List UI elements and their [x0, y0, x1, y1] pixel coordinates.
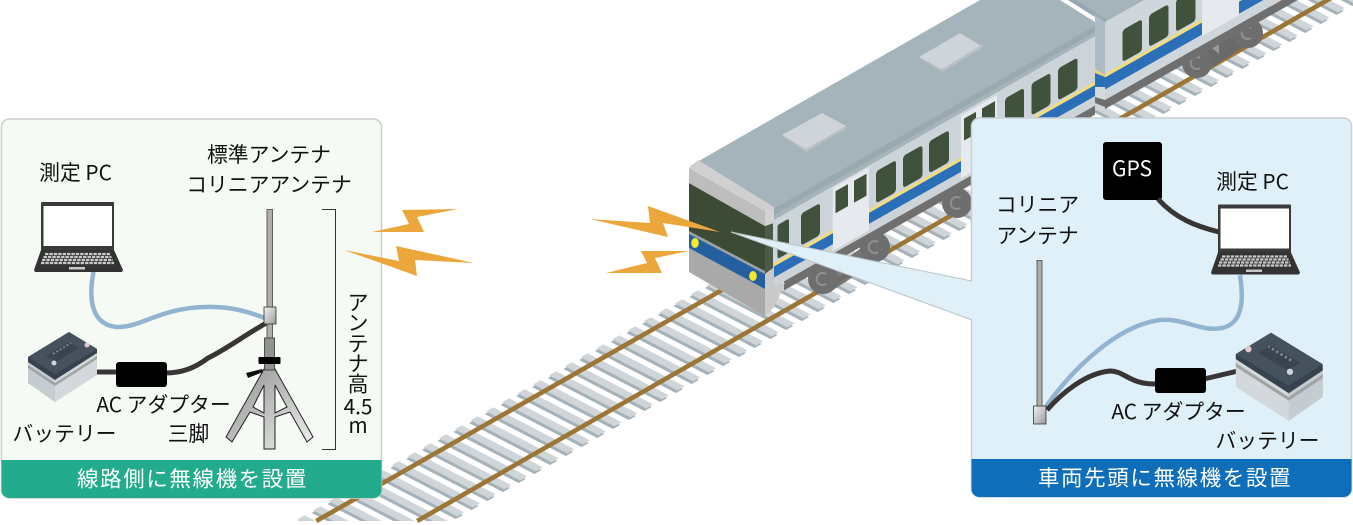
- label: antenna height: 4.5: [344, 390, 372, 420]
- icon: laptop: [34, 202, 123, 272]
- label: AC adapter: AC アダプター: [1111, 395, 1246, 425]
- doors: [833, 167, 869, 251]
- icon: battery: [28, 332, 97, 402]
- label: measurement PC: 測定 PC: [1216, 165, 1289, 195]
- callout pointer: [731, 232, 973, 320]
- footer text: 車両先頭に無線機を設置: [1038, 462, 1292, 492]
- wheels of first car: [808, 188, 972, 294]
- label: antenna height: 高: [348, 368, 368, 398]
- first car side wall: [772, 32, 1095, 297]
- icon: antenna on tripod: [226, 210, 313, 449]
- icon: AC adapter: [116, 362, 167, 387]
- bracket: antenna height: [322, 210, 336, 450]
- label: tripod: 三脚: [168, 417, 209, 447]
- windows: [778, 219, 789, 259]
- label: antenna height: [344, 286, 372, 439]
- icon: GPS unit: GPS: [1112, 153, 1152, 183]
- label: antenna height: テ: [348, 327, 368, 357]
- label: antenna height: m: [348, 409, 368, 439]
- panel: trackside radio: [2, 119, 382, 498]
- icon: antenna: [1034, 260, 1046, 424]
- label: antenna height: ン: [348, 306, 368, 336]
- blue cable: [1045, 275, 1242, 408]
- label: antenna names: コリニアアンテナ: [186, 168, 352, 198]
- label: AC adapter: AC アダプター: [96, 388, 231, 418]
- radio waves from trackside: [344, 209, 474, 276]
- label: collinear antenna: [996, 188, 1079, 249]
- label: battery: バッテリー: [13, 417, 116, 447]
- label: battery: バッテリー: [1216, 424, 1319, 454]
- stripes: [774, 230, 833, 266]
- power cable: [1047, 371, 1238, 410]
- label: measurement PC: 測定 PC: [39, 156, 112, 186]
- wheels of second car: [1182, 18, 1263, 78]
- panel footer: trackside: [2, 460, 382, 498]
- icon: battery: [1236, 333, 1323, 421]
- icon: laptop: [1211, 204, 1300, 274]
- train front: [689, 160, 785, 316]
- roof: [690, 0, 1095, 220]
- label: antenna height: ア: [348, 286, 368, 316]
- icon: AC adapter: [1155, 368, 1206, 393]
- GPS cable: [1158, 199, 1219, 232]
- label: collinear antenna: コリニア: [996, 188, 1079, 218]
- panel footer: on-train: [972, 459, 1352, 497]
- label: antenna names: 標準アンテナ: [207, 138, 331, 168]
- label: collinear antenna: アンテナ: [996, 219, 1079, 249]
- train: [689, 0, 1335, 316]
- power cable: [97, 322, 268, 373]
- blue cable: [91, 272, 267, 327]
- label: antenna names: [186, 138, 352, 198]
- icon: GPS unit: [1103, 142, 1162, 200]
- label: antenna height: ナ: [348, 347, 368, 377]
- panel: on-train radio: [731, 118, 1352, 497]
- railway track: [294, 0, 1353, 521]
- radio waves from train: [590, 206, 720, 273]
- footer text: 線路側に無線機を設置: [77, 462, 308, 494]
- second car: [1068, 0, 1335, 109]
